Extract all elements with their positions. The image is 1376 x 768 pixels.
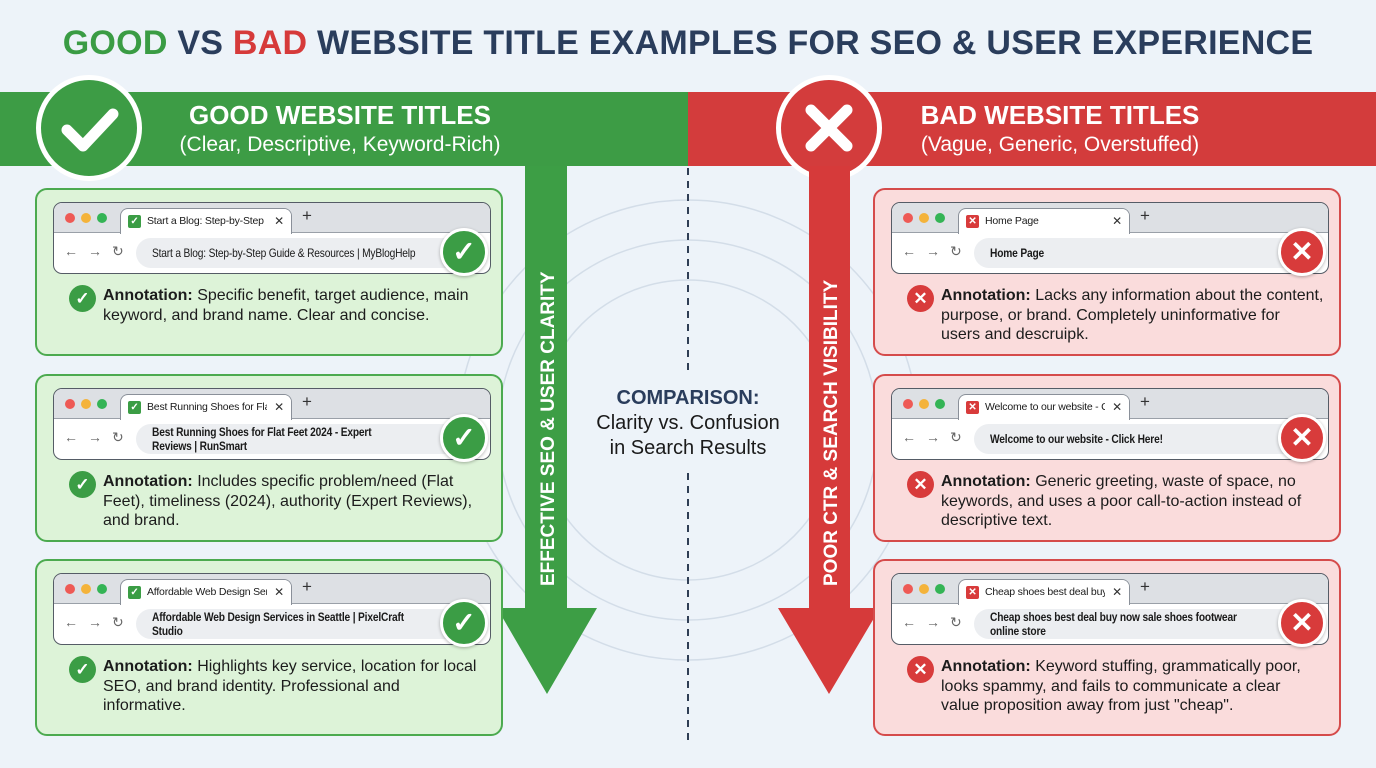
browser mockup: +: [1140, 577, 1150, 596]
annotation: users and descruipk.: [941, 326, 1089, 343]
browser mockup: +: [1140, 392, 1150, 411]
browser mockup: +: [302, 206, 312, 225]
annotation: [907, 656, 1301, 714]
annotation: Annotation: Generic greeting, waste of space, no: [941, 473, 1296, 490]
annotation: Annotation: Specific benefit, target audience, main: [103, 287, 468, 304]
center comparison text: [596, 387, 780, 459]
browser mockup: ✕: [1290, 422, 1314, 453]
card: good 1: [35, 188, 503, 356]
card: bad 2: [873, 374, 1341, 542]
browser mockup: +: [302, 577, 312, 596]
browser mockup: ←→↻: [64, 243, 134, 259]
annotation: Annotation: Highlights key service, location for local: [103, 658, 476, 675]
browser mockup: ✓: [130, 216, 139, 227]
annotation: [69, 471, 472, 529]
arrow: red: POOR CTR & SEARCH VISIBILITY: [821, 280, 842, 586]
browser mockup: ←→↻: [902, 614, 972, 630]
red header band: (Vague, Generic, Overstuffed): [921, 133, 1199, 156]
browser mockup: ←→↻: [902, 243, 972, 259]
browser mockup: [891, 388, 1329, 460]
browser mockup: Home Page: [990, 246, 1044, 260]
annotation: Annotation: Includes specific problem/need (Flat: [103, 473, 453, 490]
dashed divider: [687, 168, 689, 740]
browser mockup: ✕: [968, 587, 977, 598]
annotation: informative.: [103, 697, 186, 714]
browser mockup: +: [302, 392, 312, 411]
annotation: value proposition away from just "cheap".: [941, 697, 1233, 714]
annotation: Feet), timeliness (2024), authority (Expert Reviews),: [103, 492, 472, 510]
icon: big check: [36, 75, 142, 181]
browser mockup: Welcome to our website - Click: [985, 401, 1123, 413]
browser mockup: [53, 388, 491, 460]
annotation: SEO, and brand identity. Professional and: [103, 678, 400, 694]
browser mockup: Cheap shoes best deal buy now sale shoes footwear: [990, 610, 1237, 624]
icon: big cross: [776, 75, 882, 181]
browser mockup: ✕: [1112, 400, 1122, 414]
arrow: green: [503, 166, 597, 694]
browser mockup: ←→↻: [64, 614, 134, 630]
browser mockup: ✕: [274, 585, 284, 599]
browser mockup: ✕: [1290, 607, 1314, 638]
annotation: [907, 285, 1323, 343]
background circuit decoration: [464, 199, 912, 661]
annotation: looks spammy, and fails to communicate a clear: [941, 678, 1280, 694]
green header band: (Clear, Descriptive, Keyword-Rich): [180, 133, 500, 156]
browser mockup: online store: [990, 624, 1046, 638]
green header band: [0, 92, 688, 166]
arrow: red: [778, 171, 873, 694]
center comparison text: in Search Results: [610, 437, 766, 459]
card: good 1: ✓: [75, 289, 90, 308]
annotation: keyword, and brand name. Clear and concise.: [103, 306, 429, 324]
browser mockup: ✓: [130, 402, 139, 413]
card: good 3: ✓: [75, 660, 90, 679]
browser mockup: ✕: [968, 402, 977, 413]
arrow: green: EFFECTIVE SEO & USER CLARITY: [538, 271, 559, 586]
browser mockup: Start a Blog: Step-by-Step Guide: [147, 215, 292, 227]
card: bad 1: [873, 188, 1341, 356]
browser mockup: ✕: [274, 400, 284, 414]
browser mockup: +: [1140, 206, 1150, 225]
card: good 2: ✓: [75, 475, 90, 494]
browser mockup: Best Running Shoes for Flat Feet: [147, 401, 292, 413]
annotation: [907, 471, 1302, 529]
browser mockup: Reviews | RunSmart: [152, 439, 247, 453]
browser mockup: [53, 202, 491, 274]
annotation: descriptive text.: [941, 512, 1052, 529]
browser mockup: ✓: [452, 236, 476, 267]
browser mockup: ←→↻: [902, 429, 972, 445]
browser mockup: ✓: [130, 587, 139, 598]
title: GOOD VS BAD WEBSITE TITLE EXAMPLES FOR SEO & USER EXPERIENCE: [63, 24, 1313, 62]
annotation: keywords, and uses a poor call-to-action instead of: [941, 492, 1301, 510]
annotation: and brand.: [103, 512, 180, 529]
center comparison text: COMPARISON:: [617, 387, 759, 409]
card: bad 1: ✕: [913, 289, 928, 308]
card: bad 3: ✕: [913, 660, 928, 679]
card: bad 3: [873, 559, 1341, 736]
browser mockup: ✕: [968, 216, 977, 227]
green header band: GOOD WEBSITE TITLES: [189, 100, 491, 130]
red header band: [688, 92, 1376, 166]
card: good 3: [35, 559, 503, 736]
browser mockup: ✓: [452, 422, 476, 453]
browser mockup: Affordable Web Design Services in Seattle | PixelCraft: [152, 610, 404, 624]
browser mockup: [53, 573, 491, 645]
center comparison text: Clarity vs. Confusion: [596, 412, 780, 434]
card: bad 2: ✕: [913, 475, 928, 494]
browser mockup: Welcome to our website - Click Here!: [990, 432, 1163, 446]
annotation: [69, 656, 476, 714]
browser mockup: Start a Blog: Step-by-Step Guide & Resources | MyBlogHelp: [152, 246, 415, 260]
browser mockup: Best Running Shoes for Flat Feet 2024 - Expert: [152, 425, 371, 439]
browser mockup: Studio: [152, 624, 183, 638]
annotation: purpose, or brand. Completely uninformative for: [941, 306, 1280, 324]
browser mockup: [891, 573, 1329, 645]
browser mockup: ✕: [274, 214, 284, 228]
annotation: Annotation: Keyword stuffing, grammatically poor,: [941, 658, 1301, 675]
browser mockup: ✓: [452, 607, 476, 638]
browser mockup: Home Page: [985, 215, 1039, 227]
card: good 2: [35, 374, 503, 542]
browser mockup: Affordable Web Design Services: [147, 586, 292, 598]
red header band: BAD WEBSITE TITLES: [921, 100, 1199, 130]
browser mockup: [891, 202, 1329, 274]
browser mockup: ✕: [1112, 585, 1122, 599]
annotation: Annotation: Lacks any information about the content,: [941, 287, 1323, 304]
browser mockup: Cheap shoes best deal buy now: [985, 586, 1129, 598]
browser mockup: ✕: [1290, 236, 1314, 267]
annotation: [69, 285, 468, 324]
browser mockup: ←→↻: [64, 429, 134, 445]
browser mockup: ✕: [1112, 214, 1122, 228]
